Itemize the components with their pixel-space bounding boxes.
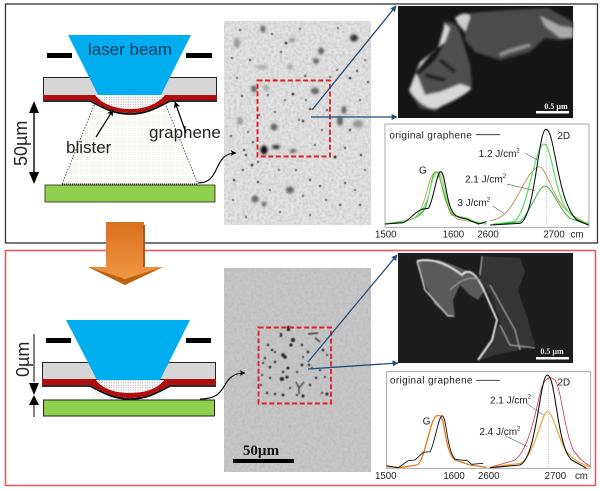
chart: bottom Raman spectrum: cm xyxy=(575,471,588,482)
diagram: bottom contact setup xyxy=(13,320,216,417)
chart: bottom Raman spectrum: G xyxy=(423,416,431,427)
image: top SEM flake xyxy=(398,6,573,118)
chart: top Raman spectrum: 3 J/cm xyxy=(457,198,487,209)
image: top SEM flake: 0.5 µm xyxy=(544,102,568,111)
chart: bottom Raman spectrum: 2 xyxy=(517,426,521,432)
chart: top Raman spectrum: 1.2 J/cm xyxy=(479,149,516,160)
chart: bottom Raman spectrum: 2700 xyxy=(545,471,566,482)
chart: top Raman spectrum: 2 xyxy=(516,148,520,154)
chart: bottom Raman spectrum: 2600 xyxy=(478,471,499,482)
arrow: curved arrow to bottom micrograph xyxy=(200,373,245,399)
chart: top Raman spectrum: G xyxy=(419,166,427,177)
diagram: top blister setup: laser beam xyxy=(88,40,172,59)
arrow: curved arrow to top micrograph xyxy=(198,153,236,183)
chart: bottom Raman spectrum: 2D xyxy=(557,378,570,389)
chart: bottom Raman spectrum: 2.4 J/cm xyxy=(479,427,517,438)
arrow: orange down arrow xyxy=(88,222,163,285)
arrow: bottom micrograph to SEM xyxy=(308,255,397,362)
image: bottom micrograph xyxy=(224,268,371,472)
diagram: top blister setup: graphene xyxy=(149,123,221,142)
chart: top Raman spectrum: 2700 xyxy=(543,230,565,241)
diagram: top blister setup xyxy=(11,35,221,202)
chart: top Raman spectrum: 2.1 J/cm xyxy=(465,175,503,186)
image: bottom SEM flake: 0.5 µm xyxy=(540,347,564,356)
chart: top Raman spectrum: cm xyxy=(571,230,584,241)
chart: bottom Raman spectrum xyxy=(375,372,591,482)
highlight: bottom dashed square xyxy=(258,328,331,404)
chart: bottom Raman spectrum: 1500 xyxy=(375,471,396,482)
chart: top Raman spectrum: 2D xyxy=(557,131,570,142)
chart: top Raman spectrum xyxy=(375,124,589,241)
diagram: top blister setup: 50µm xyxy=(11,121,31,166)
panel: top 50 micron gap xyxy=(6,4,598,243)
chart: top Raman spectrum: 2 xyxy=(503,174,507,180)
chart: top Raman spectrum: original graphene xyxy=(389,131,472,142)
image: bottom SEM flake xyxy=(398,253,573,363)
chart: bottom Raman spectrum: 2 xyxy=(528,395,532,401)
chart: top Raman spectrum: 2 xyxy=(487,197,491,203)
arrow: top micrograph to spectrum xyxy=(311,116,397,118)
image: top micrograph xyxy=(224,21,371,225)
panel: bottom 0 micron gap xyxy=(6,250,596,486)
highlight: top dashed square xyxy=(258,80,330,156)
arrow: top micrograph to SEM xyxy=(312,6,396,110)
chart: top Raman spectrum: 2600 xyxy=(477,230,499,241)
scale bar: 50 microns: 50µm xyxy=(243,443,280,459)
chart: top Raman spectrum: 1600 xyxy=(443,230,464,241)
scale bar: 50 microns xyxy=(233,443,294,463)
diagram: top blister setup: blister xyxy=(66,138,112,157)
chart: bottom Raman spectrum: original graphene xyxy=(390,376,473,387)
chart: bottom Raman spectrum: 2.1 J/cm xyxy=(490,395,528,406)
arrow: bottom micrograph to spectrum xyxy=(308,363,398,369)
chart: bottom Raman spectrum: 1600 xyxy=(443,471,465,482)
chart: top Raman spectrum: 1500 xyxy=(375,230,396,241)
diagram: bottom contact setup: 0µm xyxy=(13,342,33,377)
